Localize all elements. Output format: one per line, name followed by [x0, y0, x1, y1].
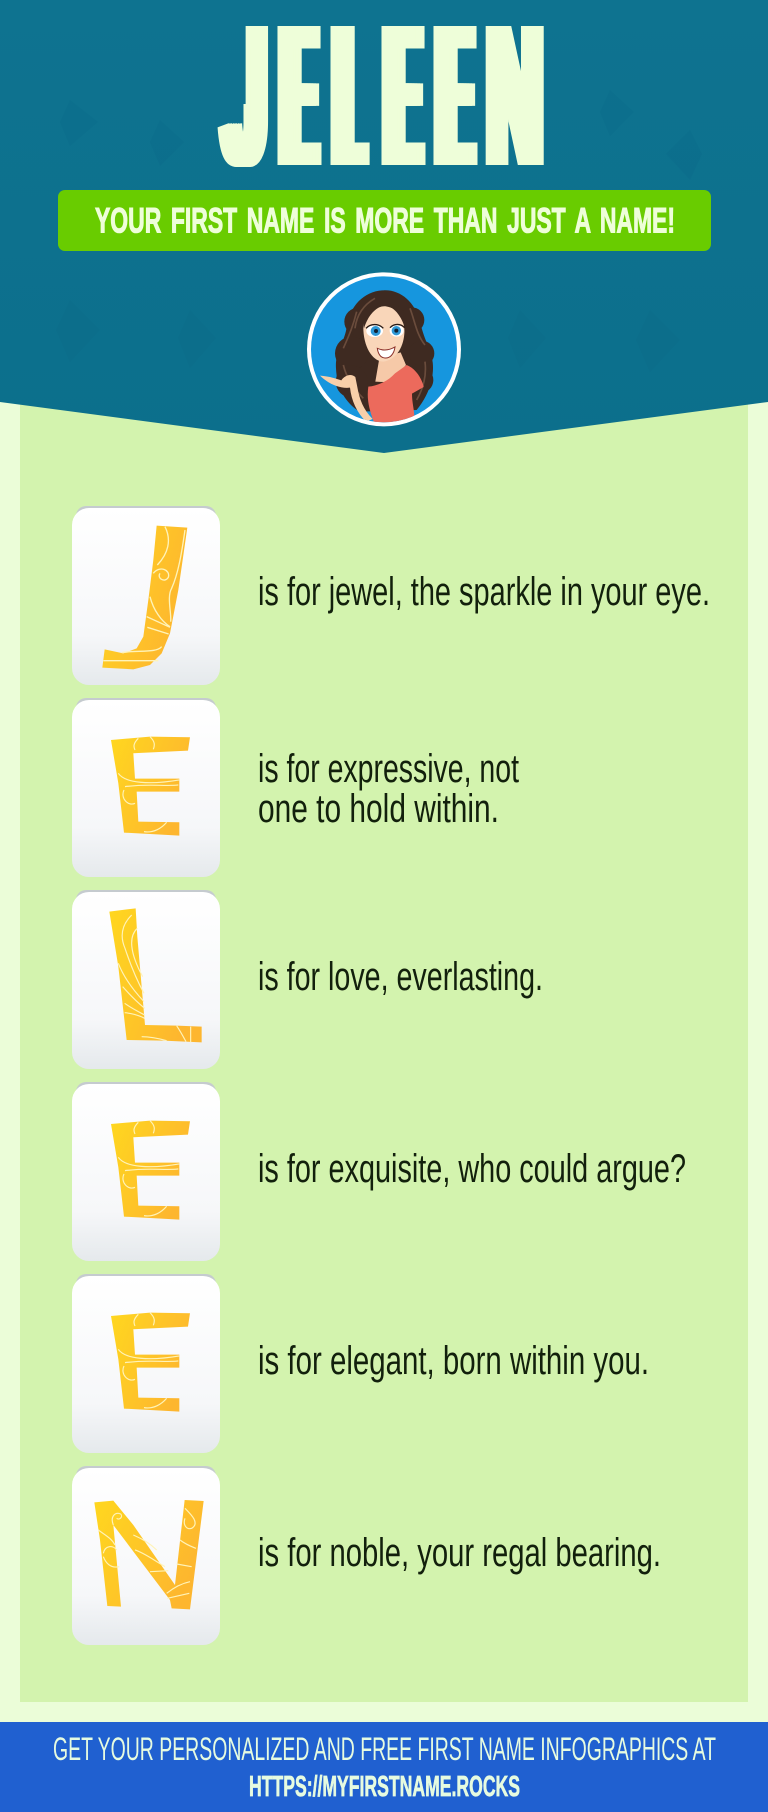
text: E line: is for expressive, not: [258, 747, 519, 791]
letter card J: [72, 506, 220, 685]
title: [218, 0, 544, 208]
footer: [0, 1722, 768, 1812]
text: L line: is for love, everlasting.: [258, 955, 543, 999]
letter card E: [72, 698, 220, 877]
letter card N: [72, 1466, 220, 1645]
text: E line: [258, 747, 519, 831]
footer: HTTPS://MYFIRSTNAME.ROCKS: [249, 1771, 520, 1803]
letter card E: [72, 1082, 220, 1261]
header background: [0, 0, 768, 453]
avatar: woman in a circle: [307, 272, 461, 426]
text: E line: one to hold within.: [258, 787, 499, 831]
content panel: [20, 390, 748, 1702]
letter card L: [72, 890, 220, 1069]
letter card E: [72, 1274, 220, 1453]
subtitle banner: [58, 190, 711, 251]
